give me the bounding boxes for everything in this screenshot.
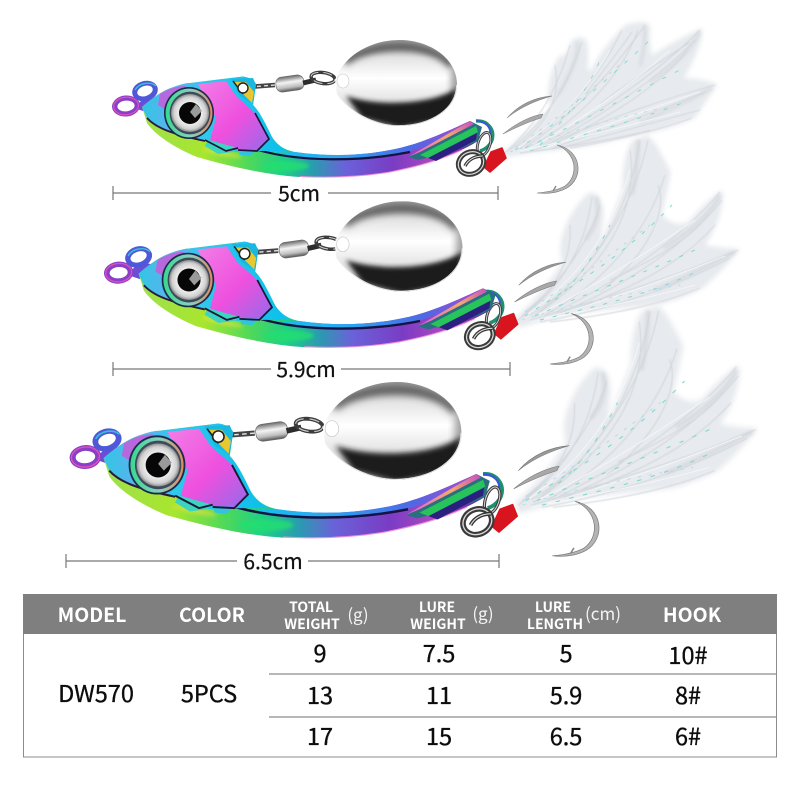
model and color cells: DW570 [58, 675, 134, 709]
split rings 1 [455, 121, 493, 178]
dimension line: 5cm [113, 178, 498, 208]
table header: (g) [472, 600, 494, 625]
treble hooks 1 [503, 96, 578, 193]
swivel 2 [250, 236, 342, 259]
rainbow body 1 [142, 76, 482, 177]
table header: WEIGHT [410, 614, 466, 634]
feather tail 3 [515, 305, 758, 514]
table header: HOOK [663, 599, 722, 628]
table row: 9g: 9 [313, 635, 327, 669]
feather tail 1 [503, 22, 718, 157]
table row: 17g: 6# [675, 718, 701, 752]
table row: 9g [313, 635, 708, 671]
table header: LURE [419, 597, 455, 617]
dimension line: 6.5cm: 6.5cm [243, 546, 303, 576]
table row: 13g [307, 677, 701, 711]
table header: MODEL [58, 599, 126, 628]
row dividers [269, 674, 776, 717]
table header: LENGTH [527, 614, 583, 634]
table row: 17g: 15 [426, 718, 452, 752]
table row: 13g: 11 [426, 677, 452, 711]
lure 3 hardware and body [69, 380, 599, 556]
lure 3: 6.5cm spinner lure [69, 305, 758, 556]
treble hooks 3 [514, 446, 599, 556]
table header: TOTAL [289, 597, 333, 617]
swivel 3 [224, 417, 324, 442]
table header: (cm) [585, 600, 621, 625]
table row: 13g: 8# [675, 677, 701, 711]
table header: COLOR [179, 599, 245, 628]
line loops 2 [103, 243, 155, 285]
feather tail 2 [515, 135, 740, 328]
specification table [23, 594, 777, 757]
table frame [24, 594, 776, 757]
table row: 17g [307, 718, 701, 752]
treble hooks 2 [514, 262, 593, 364]
table row: 17g: 6.5 [550, 718, 582, 752]
model and color cells [58, 675, 237, 709]
lure 1: 5cm spinner lure [111, 22, 718, 193]
dimension line: 5cm: 5cm [278, 178, 320, 208]
model and color cells: 5PCS [181, 675, 237, 709]
split rings 2 [463, 291, 503, 352]
lure 2: 5.9cm spinner lure [103, 135, 740, 364]
red thread wrap 2 [495, 314, 518, 339]
table row: 9g: 10# [668, 637, 708, 671]
dimension line: 5.9cm [113, 354, 510, 384]
table row: 9g: 5 [559, 635, 573, 669]
table row: 17g: 17 [307, 718, 333, 752]
spinner blade 1 [330, 38, 465, 128]
table row: 13g: 13 [307, 677, 333, 711]
red thread wrap 1 [484, 148, 506, 172]
lure 2 hardware and body [103, 199, 593, 364]
spinner blade 2 [329, 199, 471, 294]
dimension line: 5.9cm: 5.9cm [276, 354, 336, 384]
red thread wrap 3 [492, 505, 517, 532]
table row: 13g: 5.9 [550, 677, 582, 711]
line loops 1 [111, 78, 160, 118]
line loops 3 [69, 425, 124, 470]
table header: LURE [535, 597, 571, 617]
table header [23, 594, 777, 634]
dimension line: 6.5cm [66, 546, 499, 576]
rainbow body 3 [104, 424, 490, 538]
swivel 1 [248, 71, 336, 93]
table header: WEIGHT [284, 614, 340, 634]
split rings 3 [459, 474, 503, 539]
spinner blade 3 [317, 380, 471, 482]
rainbow body 2 [139, 242, 496, 348]
table row: 9g: 7.5 [423, 635, 455, 669]
table header: (g) [347, 601, 369, 626]
